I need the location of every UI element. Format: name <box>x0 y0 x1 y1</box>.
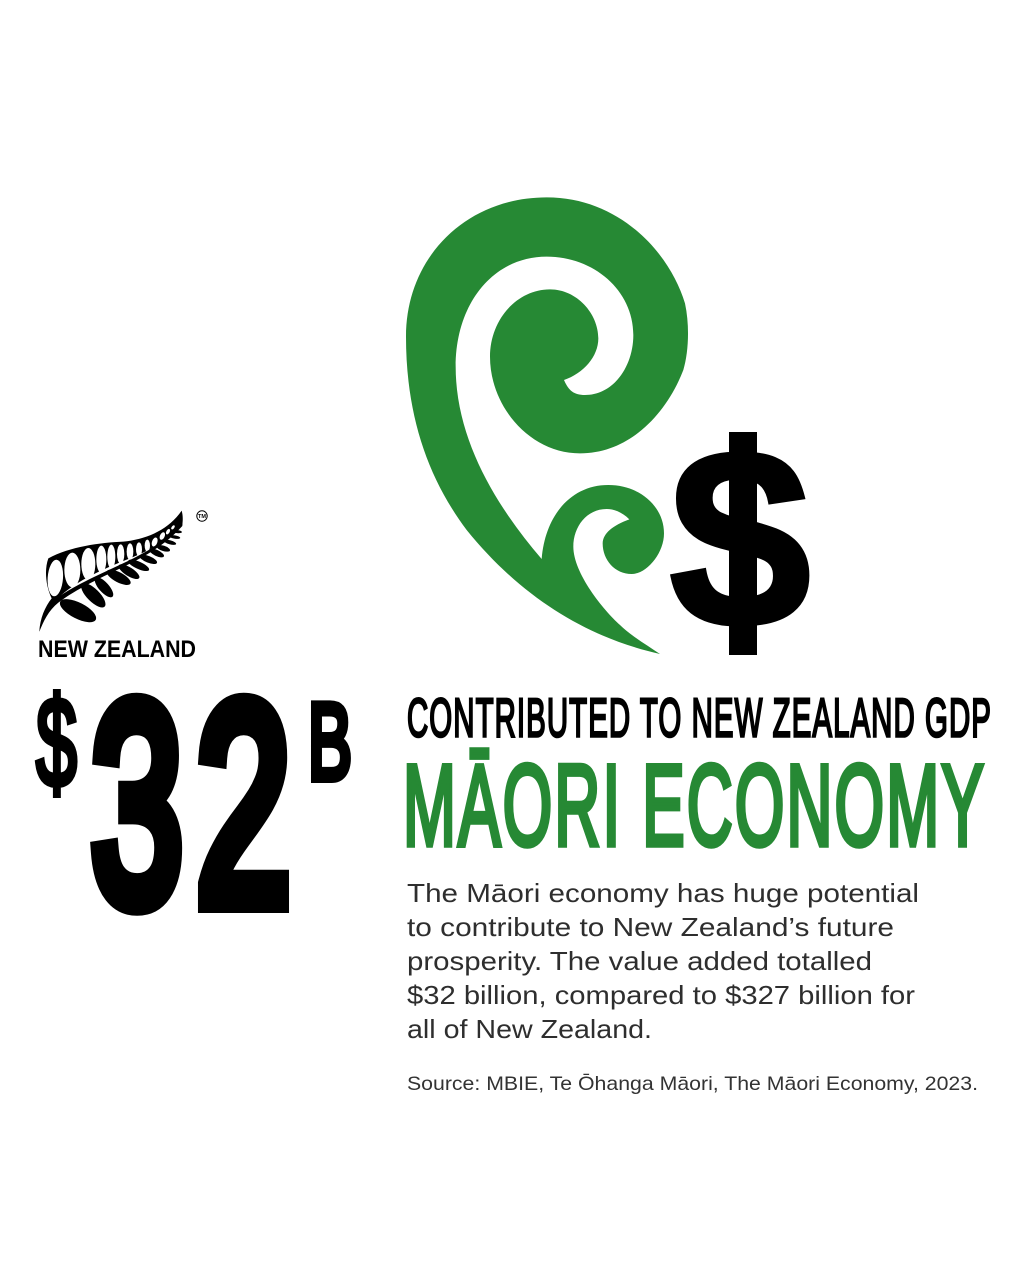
big stat: $32B: $ <box>36 671 77 813</box>
big stat: $32B <box>36 646 352 963</box>
logo wordmark: NEW ZEALAND <box>38 636 196 663</box>
source note: Source: MBIE, Te Ōhanga Māori, The Māori Economy, 2023. <box>407 1072 978 1095</box>
big stat: $32B: B <box>308 681 352 803</box>
logo: silver fern New Zealand <box>38 511 207 663</box>
body paragraph <box>407 878 919 1044</box>
big stat: $32B: 3 <box>91 646 183 963</box>
icon: fern frond <box>39 511 183 632</box>
icon: green koru spiral <box>406 197 688 654</box>
icon: trademark <box>197 511 207 521</box>
icon: trademark: TM <box>198 514 206 520</box>
body paragraph: all of New Zealand. <box>407 1014 652 1044</box>
body paragraph: prosperity. The value added totalled <box>407 946 872 976</box>
icon: black dollar sign: $ <box>669 396 811 682</box>
big stat: $32B: 2 <box>196 646 291 963</box>
body paragraph: to contribute to New Zealand’s future <box>407 912 894 942</box>
body paragraph: The Māori economy has huge potential <box>407 878 919 908</box>
body paragraph: $32 billion, compared to $327 billion for <box>407 980 915 1010</box>
